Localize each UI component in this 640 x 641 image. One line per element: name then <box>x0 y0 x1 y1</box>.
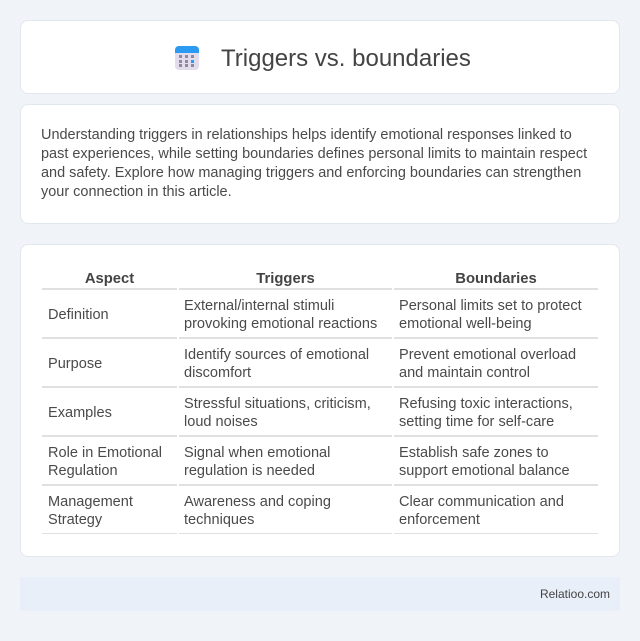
header card <box>20 20 620 94</box>
intro text <box>41 127 588 200</box>
row: Purpose: discomfort <box>184 365 251 381</box>
row: Examples: loud noises <box>184 414 258 430</box>
column header: Triggers: Triggers <box>256 271 315 287</box>
row: Management Strategy: techniques <box>184 512 254 528</box>
row: Purpose <box>48 347 576 381</box>
row: Management Strategy: Strategy <box>48 512 102 528</box>
intro text: Understanding triggers in relationships helps identify emotional responses linked to <box>41 127 572 143</box>
row: Management Strategy <box>48 494 564 528</box>
row: Role in Emotional Regulation: Regulation <box>48 463 118 479</box>
row: Role in Emotional Regulation: Role in Emotional <box>48 445 162 461</box>
intro panel <box>20 104 620 224</box>
column header: Aspect: Aspect <box>85 271 134 287</box>
row: Management Strategy: Management <box>48 494 133 510</box>
table panel <box>20 244 620 557</box>
row: Definition: Personal limits set to protect <box>399 298 582 314</box>
intro text: past experiences, while setting boundaries defines personal limits to maintain respect <box>41 146 587 162</box>
intro text: your connection in this article. <box>41 184 232 200</box>
intro text: and safety. Explore how managing triggers and enforcing boundaries can strengthen <box>41 165 581 181</box>
row: Definition <box>48 298 582 332</box>
row: Definition: Definition <box>48 307 109 323</box>
row: Purpose: Identify sources of emotional <box>184 347 369 363</box>
row: Role in Emotional Regulation: Signal when emotional <box>184 445 330 461</box>
row: Management Strategy: Clear communication and <box>399 494 564 510</box>
row: Examples: setting time for self-care <box>399 414 554 430</box>
row: Examples <box>48 396 573 430</box>
row: Definition: emotional well-being <box>399 316 532 332</box>
row: Role in Emotional Regulation: support emotional balance <box>399 463 570 479</box>
row: Definition: External/internal stimuli <box>184 298 334 314</box>
row: Role in Emotional Regulation <box>48 445 570 479</box>
row: Management Strategy: enforcement <box>399 512 480 528</box>
footer bar <box>20 577 620 611</box>
footer brand: Relatioo.com <box>540 587 610 601</box>
row: Purpose: Prevent emotional overload <box>399 347 576 363</box>
comparison table <box>42 271 598 534</box>
column header: Boundaries: Boundaries <box>455 271 537 287</box>
row: Examples: Refusing toxic interactions, <box>399 396 573 412</box>
row: Purpose: Purpose <box>48 356 102 372</box>
row: Purpose: and maintain control <box>399 365 530 381</box>
row: Examples: Examples <box>48 405 112 421</box>
row: Examples: Stressful situations, criticism, <box>184 396 371 412</box>
row: Role in Emotional Regulation: regulation is needed <box>184 463 315 479</box>
title: Triggers vs. boundaries <box>221 45 471 72</box>
row: Definition: provoking emotional reactions <box>184 316 377 332</box>
row: Management Strategy: Awareness and coping <box>184 494 331 510</box>
row: Role in Emotional Regulation: Establish safe zones to <box>399 445 549 461</box>
icon: calendar <box>175 46 199 70</box>
